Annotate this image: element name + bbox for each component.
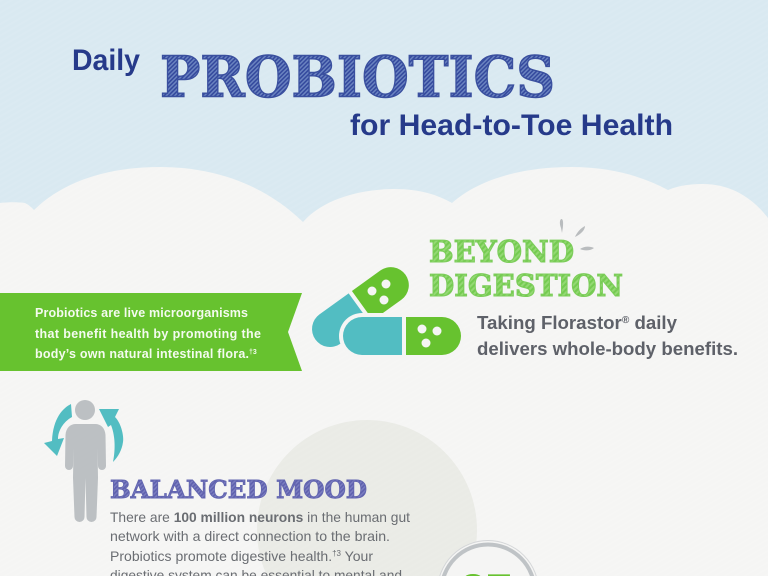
- horizontal capsule: [339, 313, 465, 359]
- tilted capsule: [305, 260, 416, 354]
- text: balanced mood body: Probiotics promote digestive health.: [110, 548, 332, 564]
- text: whole-body benefits: Taking Florastor: [477, 312, 621, 333]
- decorative beige circle: [257, 420, 477, 576]
- ribbon text: †3: [249, 349, 257, 356]
- stat badge: [438, 540, 538, 576]
- icon: capsules: [305, 260, 465, 359]
- ribbon text: body’s own natural intestinal flora.: [35, 347, 249, 361]
- ribbon text: [35, 306, 261, 361]
- cloud background: [0, 167, 768, 576]
- title: for Head-to-Toe Health: for Head-to-Toe Health: [350, 109, 673, 142]
- text: whole-body benefits: daily: [629, 312, 678, 333]
- title: PROBIOTICS: PROBIOTICS: [160, 44, 555, 110]
- ribbon text: that benefit health by promoting the: [35, 327, 261, 341]
- ribbon shape: [0, 293, 302, 371]
- heading: balanced mood: BALANCED MOOD: [110, 475, 367, 504]
- text: balanced mood body: [110, 509, 410, 576]
- text: balanced mood body: network with a direct connection to the brain.: [110, 528, 390, 544]
- left arrow: [44, 404, 72, 456]
- title: [72, 44, 673, 142]
- heading: beyond digestion: BEYOND: [429, 234, 574, 269]
- icon: person with arrows: [44, 400, 123, 522]
- right arrow: [99, 409, 123, 462]
- text: balanced mood body: There are 100 million neurons in the human gut: [110, 509, 410, 525]
- badge ring: [438, 540, 538, 576]
- ribbon text: Probiotics are live microorganisms: [35, 306, 248, 320]
- text: balanced mood body: Your: [341, 548, 373, 564]
- person: [65, 400, 106, 522]
- text: balanced mood body: †3: [332, 549, 342, 558]
- text: whole-body benefits: ®: [622, 315, 630, 326]
- icon: sparkle marks: [560, 219, 594, 250]
- panel: definition ribbon: [0, 293, 302, 371]
- heading: beyond digestion: [429, 234, 623, 303]
- text: whole-body benefits: delivers whole-body benefits.: [477, 338, 738, 359]
- text: whole-body benefits: [477, 312, 738, 359]
- heading: beyond digestion: DIGESTION: [429, 268, 623, 303]
- title: Daily: Daily: [72, 44, 140, 77]
